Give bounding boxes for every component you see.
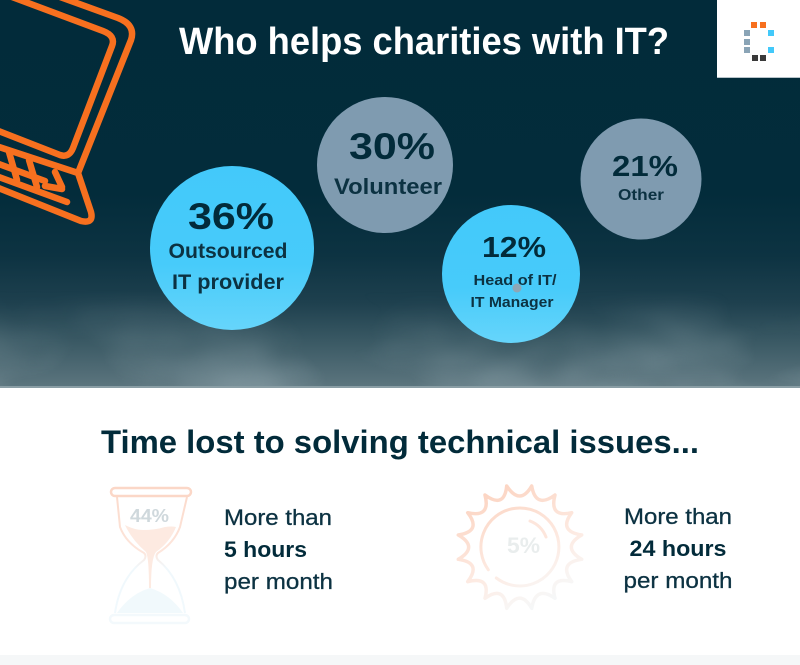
- bubble: 30% volunteer: 30%: [349, 126, 435, 167]
- icon: hourglass 44%: 44%: [130, 506, 169, 526]
- bubble: 30% volunteer: Volunteer: [334, 174, 442, 199]
- bubble: 36% outsourced IT provider: [150, 166, 314, 330]
- bubble: 21% other: [580, 118, 702, 240]
- bubble: 36% outsourced IT provider: 36%: [188, 196, 274, 237]
- text: more than 24 hours per month: 24 hours: [630, 536, 726, 561]
- bubble: 36% outsourced IT provider: IT provider: [172, 271, 284, 294]
- title: Who helps charities with IT?: [179, 21, 669, 63]
- text: more than 5 hours per month: More than: [224, 505, 332, 530]
- bubble: 30% volunteer: [317, 97, 453, 233]
- text: more than 24 hours per month: per month: [624, 568, 732, 593]
- text: more than 24 hours per month: [624, 504, 732, 593]
- icon: gear 5%: [458, 486, 582, 608]
- section heading: Time lost to solving technical issues...: [101, 424, 699, 460]
- bubble: 12% head of IT: 12%: [482, 232, 546, 264]
- bubble: 36% outsourced IT provider: Outsourced: [168, 240, 288, 263]
- logo tile: [717, 0, 800, 78]
- icon: laptop: [0, 0, 132, 222]
- text: more than 5 hours per month: [224, 505, 333, 594]
- bubble: 12% head of IT: Head of IT/: [474, 272, 557, 289]
- footer strip: [0, 655, 800, 665]
- bubble: 21% other: 21%: [612, 151, 678, 183]
- bubble: 12% head of IT: IT Manager: [470, 294, 554, 311]
- text: more than 5 hours per month: per month: [224, 569, 333, 594]
- text: more than 24 hours per month: More than: [624, 504, 732, 529]
- bubble: 12% head of IT: [442, 205, 580, 343]
- bubble: 21% other: Other: [618, 187, 664, 204]
- icon: gear 5%: 5%: [507, 533, 540, 558]
- text: more than 5 hours per month: 5 hours: [224, 537, 307, 562]
- panel: dark header background: [0, 0, 800, 388]
- icon: hourglass 44%: [110, 488, 191, 623]
